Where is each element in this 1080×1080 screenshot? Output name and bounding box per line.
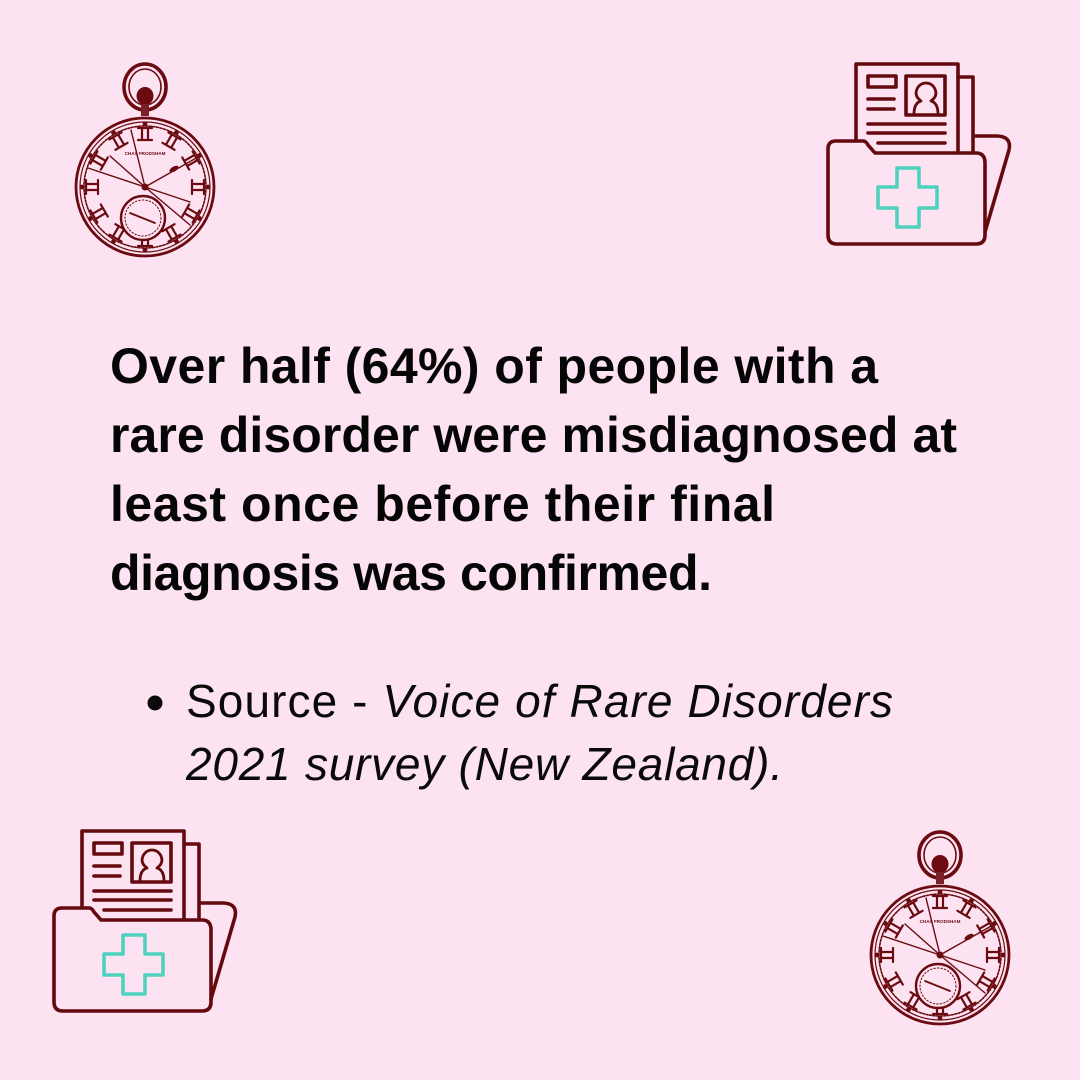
- heading: misdiagnosis statistic: diagnosis was confirmed.: [110, 545, 712, 601]
- heading: misdiagnosis statistic: [110, 338, 957, 601]
- text block: source bullet: 2021 survey (New Zealand).: [185, 738, 783, 790]
- text block: source bullet: [148, 675, 893, 790]
- icon: medical folder top right: [828, 64, 1009, 244]
- icon: medical folder bottom left: [54, 831, 235, 1011]
- icon: pocket watch top left: [76, 64, 214, 256]
- heading: misdiagnosis statistic: Over half (64%) of people with a: [110, 338, 879, 394]
- heading: misdiagnosis statistic: rare disorder were misdiagnosed at: [110, 407, 957, 463]
- icon: pocket watch bottom right: [871, 832, 1009, 1024]
- heading: misdiagnosis statistic: least once before their final: [110, 476, 775, 532]
- text block: source bullet: Source - Voice of Rare Disorders: [186, 675, 893, 727]
